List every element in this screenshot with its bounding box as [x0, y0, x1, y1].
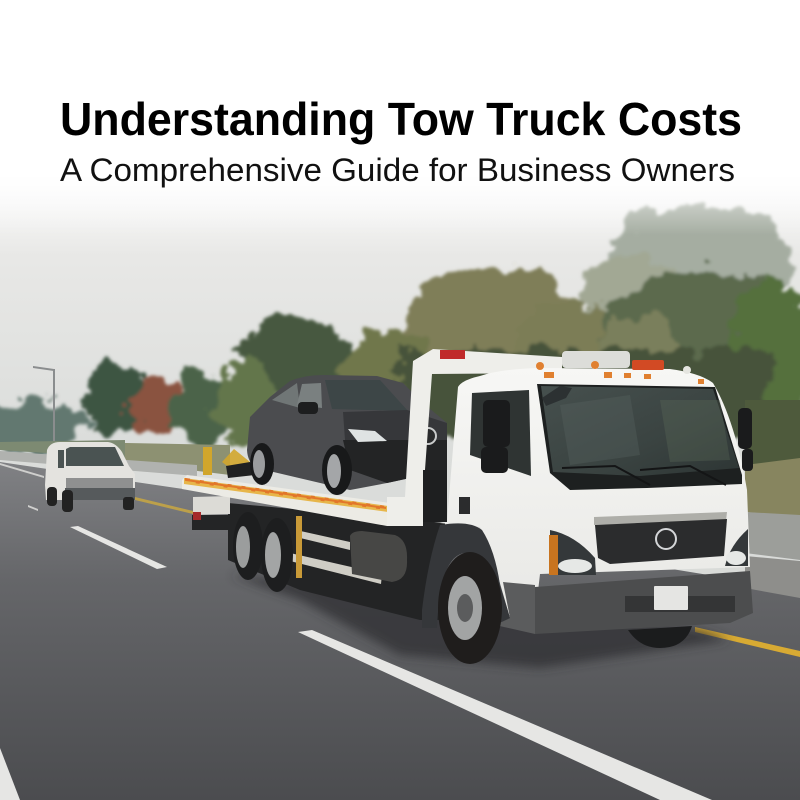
cab roof lights — [562, 351, 630, 368]
rear bumper bar — [192, 496, 230, 530]
title fade — [0, 0, 800, 235]
fuel tank — [350, 531, 407, 582]
side rails — [290, 553, 382, 584]
road shoulder right — [745, 556, 800, 598]
headboard — [387, 349, 562, 526]
guard rail left — [0, 451, 197, 476]
roof markers — [536, 361, 704, 384]
tow truck — [182, 349, 753, 664]
front wheel arch — [422, 523, 510, 628]
guard rail right — [745, 512, 800, 560]
black equipment behind cab — [423, 470, 447, 522]
door handle — [459, 497, 470, 514]
road — [0, 462, 800, 800]
headlights — [550, 530, 596, 575]
flatbed deck — [182, 475, 390, 526]
car on flatbed — [247, 375, 447, 495]
tree line — [0, 203, 800, 452]
truck cab body — [440, 368, 750, 618]
wipers — [562, 466, 726, 485]
icon: white van — [45, 442, 135, 512]
title: Understanding Tow Truck Costs — [60, 93, 742, 145]
sun visor mirror — [542, 386, 572, 406]
front bumper — [535, 571, 753, 634]
under-bed chassis — [228, 503, 445, 620]
rear wheels — [233, 512, 293, 592]
subtitle: A Comprehensive Guide for Business Owners — [60, 152, 735, 188]
truck shadow — [230, 575, 730, 668]
front wheels — [438, 552, 692, 664]
lamp post — [33, 366, 55, 441]
side door window — [470, 390, 531, 476]
hedges and grass — [0, 400, 800, 517]
step — [495, 582, 535, 634]
windshield — [537, 384, 742, 490]
mirrors — [481, 400, 753, 473]
red top light — [440, 350, 465, 359]
ramp lift yellow — [203, 447, 255, 478]
front grille — [594, 512, 727, 525]
lane markings — [0, 463, 800, 800]
